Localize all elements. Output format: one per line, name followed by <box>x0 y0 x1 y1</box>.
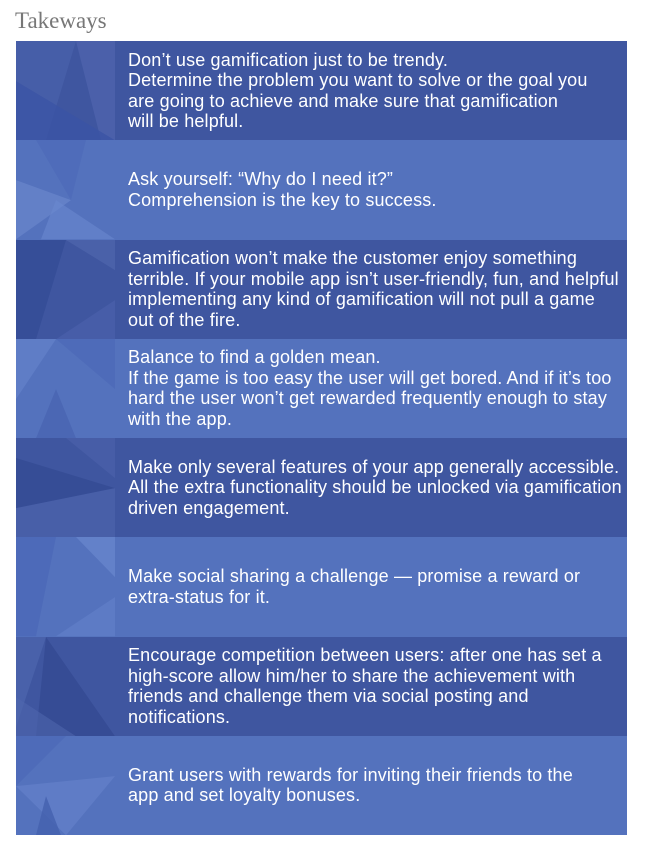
row 7: friends and challenge them via social posting and <box>128 686 529 706</box>
row 5: driven engagement. <box>128 498 290 518</box>
row 5: Make only several features of your app generally accessible. <box>128 457 619 477</box>
row 8 <box>16 736 627 835</box>
row 5 <box>16 438 627 537</box>
row 4: with the app. <box>128 409 232 429</box>
row 2: Comprehension is the key to success. <box>128 190 437 210</box>
row 2 <box>16 140 627 240</box>
row 6: extra-status for it. <box>128 587 270 607</box>
row 3: out of the fire. <box>128 310 240 330</box>
row 8: app and set loyalty bonuses. <box>128 785 360 805</box>
row 7 <box>16 636 627 736</box>
row 3: implementing any kind of gamification will not pull a game <box>128 289 595 309</box>
row 4 <box>16 339 627 438</box>
row 4: Balance to find a golden mean. <box>128 347 381 367</box>
row 7: Encourage competition between users: after one has set a <box>128 645 602 665</box>
row 8: Grant users with rewards for inviting their friends to the <box>128 765 573 785</box>
row 6 <box>16 537 627 636</box>
row 1: are going to achieve and make sure that gamification <box>128 91 558 111</box>
row 4: hard the user won’t get rewarded frequently enough to stay <box>128 388 607 408</box>
title: Takeways <box>15 8 107 33</box>
row 3 <box>16 240 627 339</box>
row 6: Make social sharing a challenge — promise a reward or <box>128 566 580 586</box>
row 2: Ask yourself: “Why do I need it?” <box>128 169 393 189</box>
row 1: will be helpful. <box>128 111 243 131</box>
row 7: notifications. <box>128 707 230 727</box>
row 1: Determine the problem you want to solve or the goal you <box>128 70 588 90</box>
row 1 <box>16 41 627 140</box>
row 3: Gamification won’t make the customer enjoy something <box>128 248 577 268</box>
row 7: high-score allow him/her to share the achievement with <box>128 666 575 686</box>
row 3: terrible. If your mobile app isn’t user-friendly, fun, and helpful <box>128 269 619 289</box>
row 1: Don’t use gamification just to be trendy. <box>128 50 448 70</box>
row 4: If the game is too easy the user will get bored. And if it’s too <box>128 368 612 388</box>
row 5: All the extra functionality should be unlocked via gamification <box>128 477 622 497</box>
